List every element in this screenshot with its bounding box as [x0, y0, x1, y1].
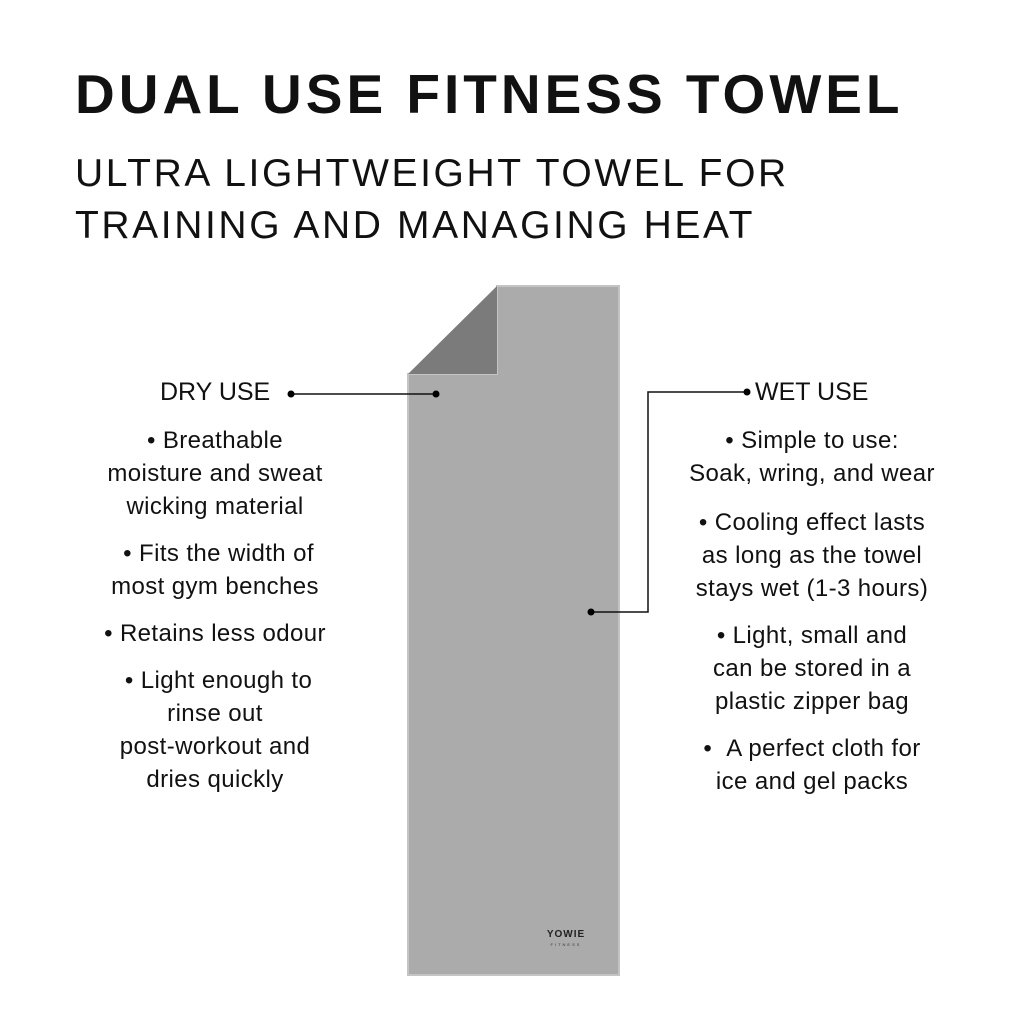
dry use list: • Retains less odour [104, 620, 326, 647]
dry use list: rinse out [167, 700, 263, 727]
wet use heading: WET USE [755, 378, 868, 406]
towel illustration: YOWIE [547, 929, 585, 940]
subtitle: ULTRA LIGHTWEIGHT TOWEL FOR [75, 152, 789, 195]
dry use heading: DRY USE [160, 378, 270, 406]
subtitle: TRAINING AND MANAGING HEAT [75, 204, 755, 247]
dry use list [104, 427, 326, 793]
wet use list [689, 427, 935, 795]
wet use list: • Light, small and [717, 622, 907, 649]
wet use list: as long as the towel [702, 542, 922, 569]
dry use list: dries quickly [146, 766, 284, 793]
wet use list: stays wet (1-3 hours) [696, 575, 928, 602]
wet use list: • Cooling effect lasts [699, 509, 925, 536]
wet use list: Soak, wring, and wear [689, 460, 935, 487]
wet use list: • A perfect cloth for [703, 735, 921, 762]
title: DUAL USE FITNESS TOWEL [75, 63, 904, 125]
towel illustration: FITNESS [551, 942, 581, 947]
wet use list: plastic zipper bag [715, 688, 909, 715]
dry use list: • Fits the width of [123, 540, 314, 567]
wet use list: can be stored in a [713, 655, 911, 682]
wet connector [588, 388, 750, 616]
dry connector [288, 390, 440, 398]
dry use list: post-workout and [120, 733, 310, 760]
wet use list: • Simple to use: [725, 427, 899, 454]
dry use list: most gym benches [111, 573, 319, 600]
dry use list: wicking material [126, 493, 304, 520]
dry use list: moisture and sweat [107, 460, 323, 487]
subtitle [75, 152, 789, 247]
dry use list: • Breathable [147, 427, 283, 454]
dry use list: • Light enough to [125, 667, 312, 694]
wet use list: ice and gel packs [716, 768, 908, 795]
